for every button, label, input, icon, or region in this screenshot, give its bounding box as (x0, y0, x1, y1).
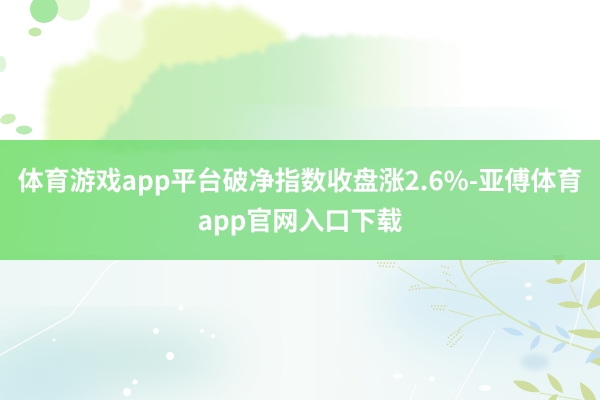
decorative circles top left (0, 0, 145, 134)
lower sky wash (0, 121, 600, 400)
title banner (0, 140, 600, 260)
title (18, 161, 582, 238)
branch stems (398, 255, 600, 400)
blue leaves (502, 282, 600, 370)
white speckles and lines lower left (0, 255, 215, 396)
title: app官网入口下载 (198, 201, 402, 238)
flower clusters (377, 260, 500, 347)
olive leaves (513, 255, 600, 400)
title: 体育游戏app平台破净指数收盘涨2.6%-亚傅体育 (18, 161, 582, 198)
green paint splash (88, 34, 470, 150)
white streaks lower right (393, 282, 532, 400)
yellow-green paint splash (44, 5, 292, 150)
